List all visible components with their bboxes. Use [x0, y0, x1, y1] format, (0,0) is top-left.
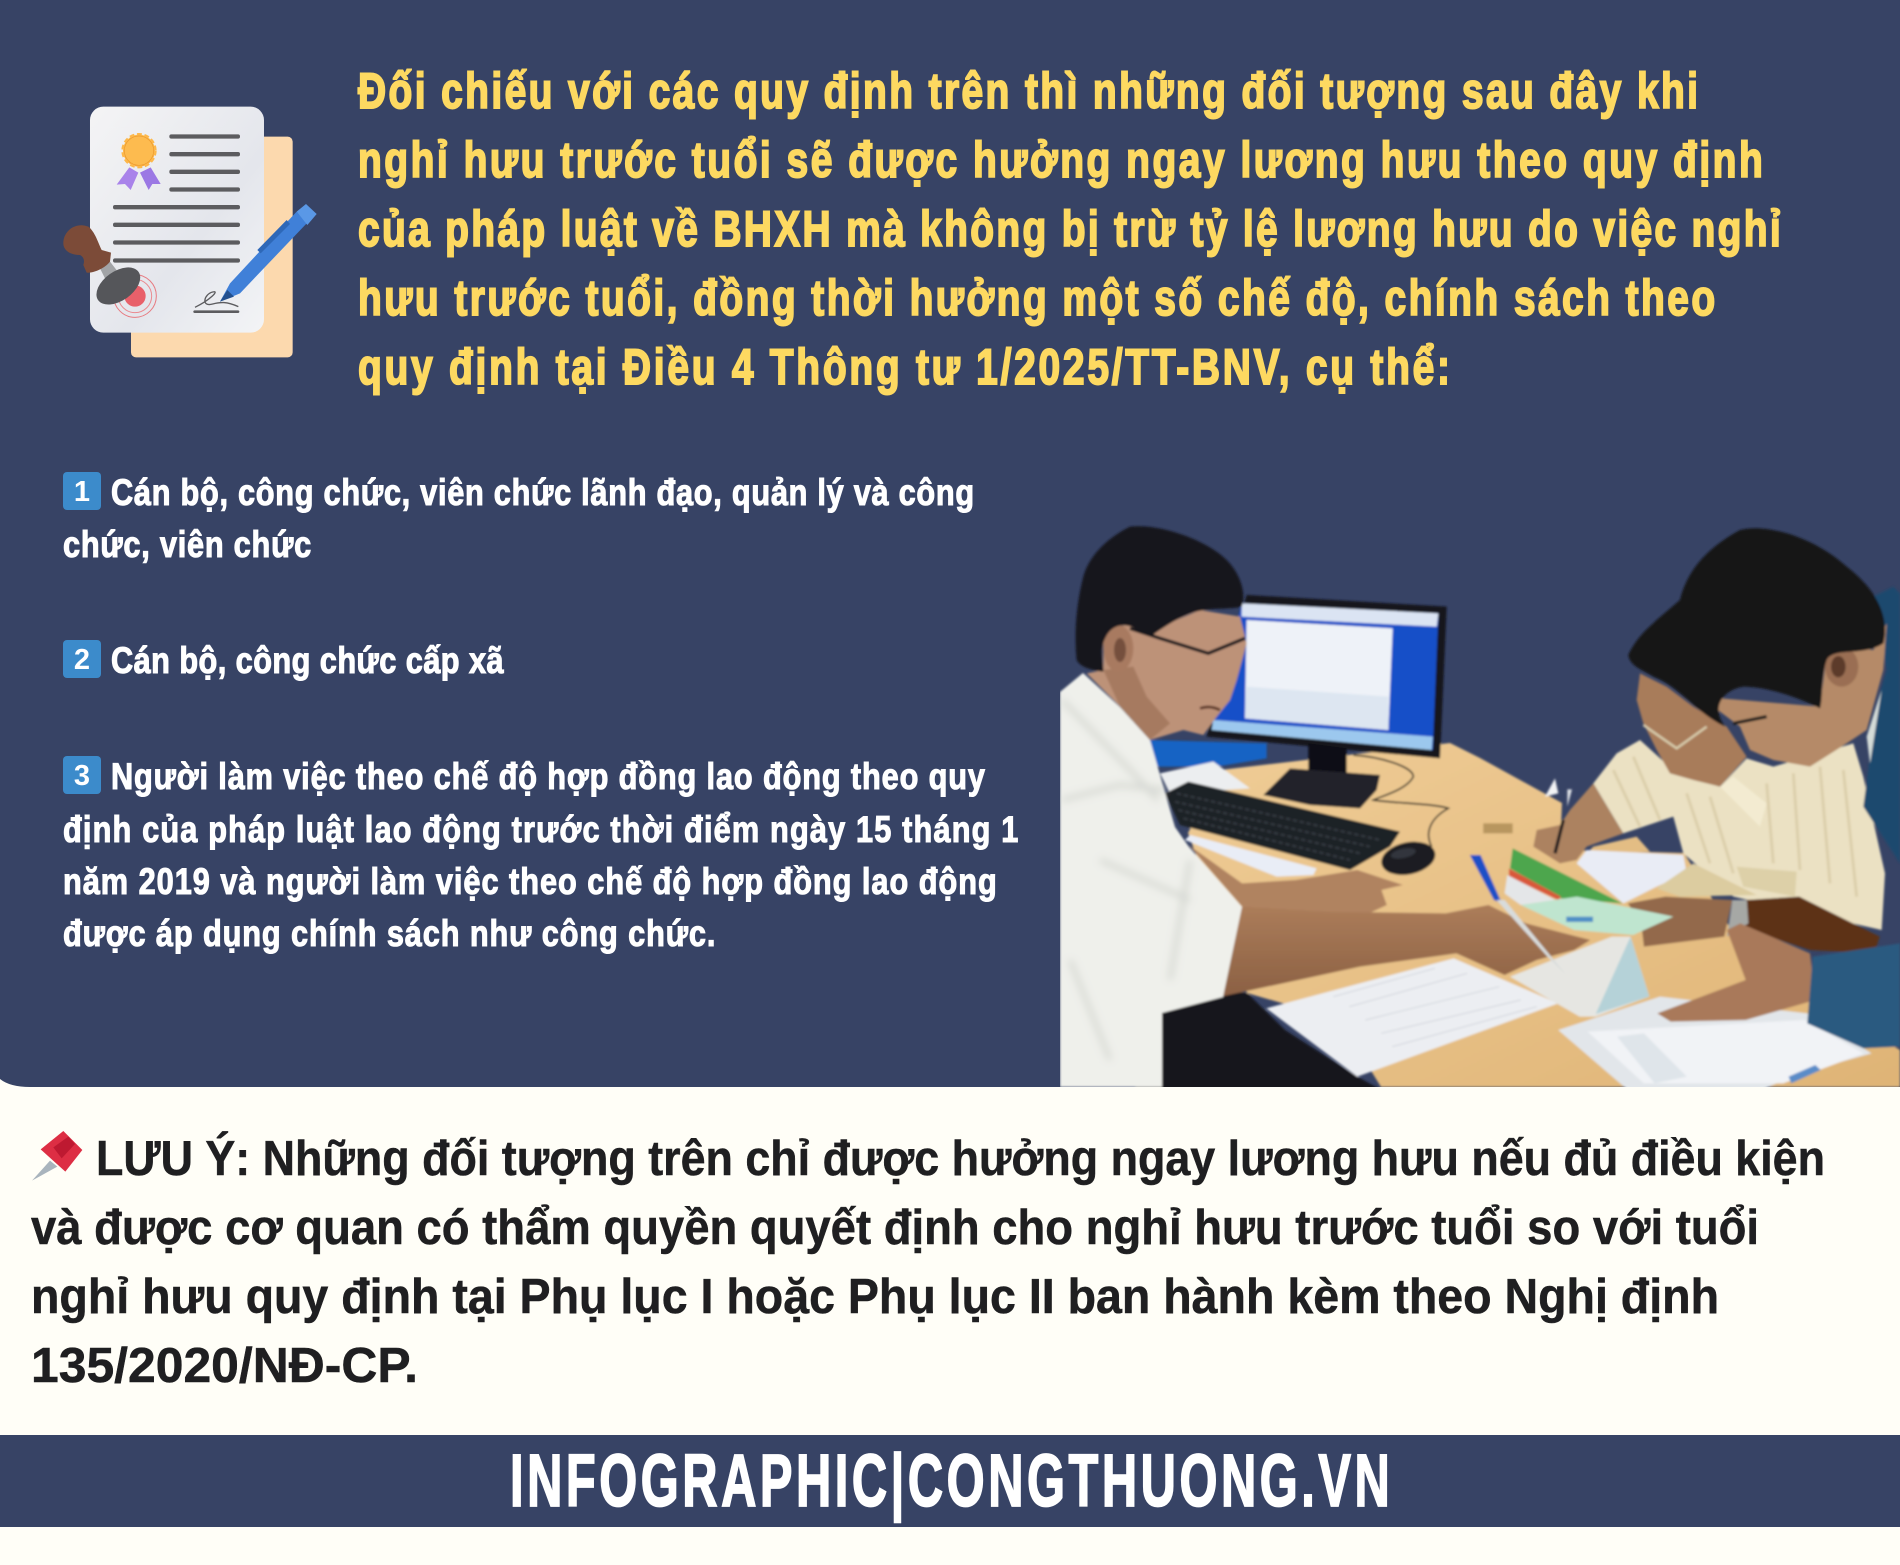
badge 3: 3: [74, 760, 90, 792]
panel: note text: [31, 1131, 1825, 1393]
heading paragraph: Đối chiếu với các quy định trên thì những đối tượng sau đây khi: [358, 62, 1698, 119]
heading paragraph: quy định tại Điều 4 Thông tư 1/2025/TT-BNV, cụ thể:: [358, 338, 1450, 395]
list item 3: năm 2019 và người làm việc theo chế độ hợp đồng lao động: [63, 861, 997, 903]
panel: navy top section: [0, 0, 1900, 1087]
photo: officials at a desk reviewing documents: [1060, 526, 1900, 1090]
list item 1: chức, viên chức: [63, 524, 311, 566]
list item 3: [63, 756, 1018, 955]
heading paragraph: của pháp luật về BHXH mà không bị trừ tỷ lệ lương hưu do việc nghỉ: [358, 200, 1781, 257]
list item 1: [63, 472, 974, 566]
badge 2: 2: [74, 644, 90, 676]
panel: note text: nghỉ hưu quy định tại Phụ lục I hoặc Phụ lục II ban hành kèm theo Nghị định: [31, 1270, 1719, 1324]
badge 1: 1: [74, 476, 90, 508]
panel: note text: 135/2020/NĐ-CP.: [31, 1339, 418, 1393]
panel: note text: và được cơ quan có thẩm quyền quyết định cho nghỉ hưu trước tuổi so với tuổi: [31, 1201, 1759, 1255]
list item 2: Cán bộ, công chức cấp xã: [111, 640, 504, 682]
heading paragraph: [358, 62, 1781, 395]
icon: document with seal, stamp and pen: [63, 107, 317, 357]
list item 3: được áp dụng chính sách như công chức.: [63, 913, 715, 955]
list item 1: Cán bộ, công chức, viên chức lãnh đạo, quản lý và công: [111, 472, 974, 514]
footer band: [0, 1435, 1900, 1527]
badge 2: [63, 640, 101, 678]
list item 3: Người làm việc theo chế độ hợp đồng lao động theo quy: [111, 756, 985, 798]
heading paragraph: nghỉ hưu trước tuổi sẽ được hưởng ngay lương hưu theo quy định: [358, 131, 1763, 188]
heading paragraph: hưu trước tuổi, đồng thời hưởng một số chế độ, chính sách theo: [358, 269, 1715, 326]
badge 1: [63, 472, 101, 510]
list item 3: định của pháp luật lao động trước thời điểm ngày 15 tháng 1: [63, 809, 1018, 851]
icon: red pushpin: [32, 1131, 82, 1181]
footer text: INFOGRAPHIC|CONGTHUONG.VN: [510, 1440, 1390, 1523]
badge 3: [63, 756, 101, 794]
